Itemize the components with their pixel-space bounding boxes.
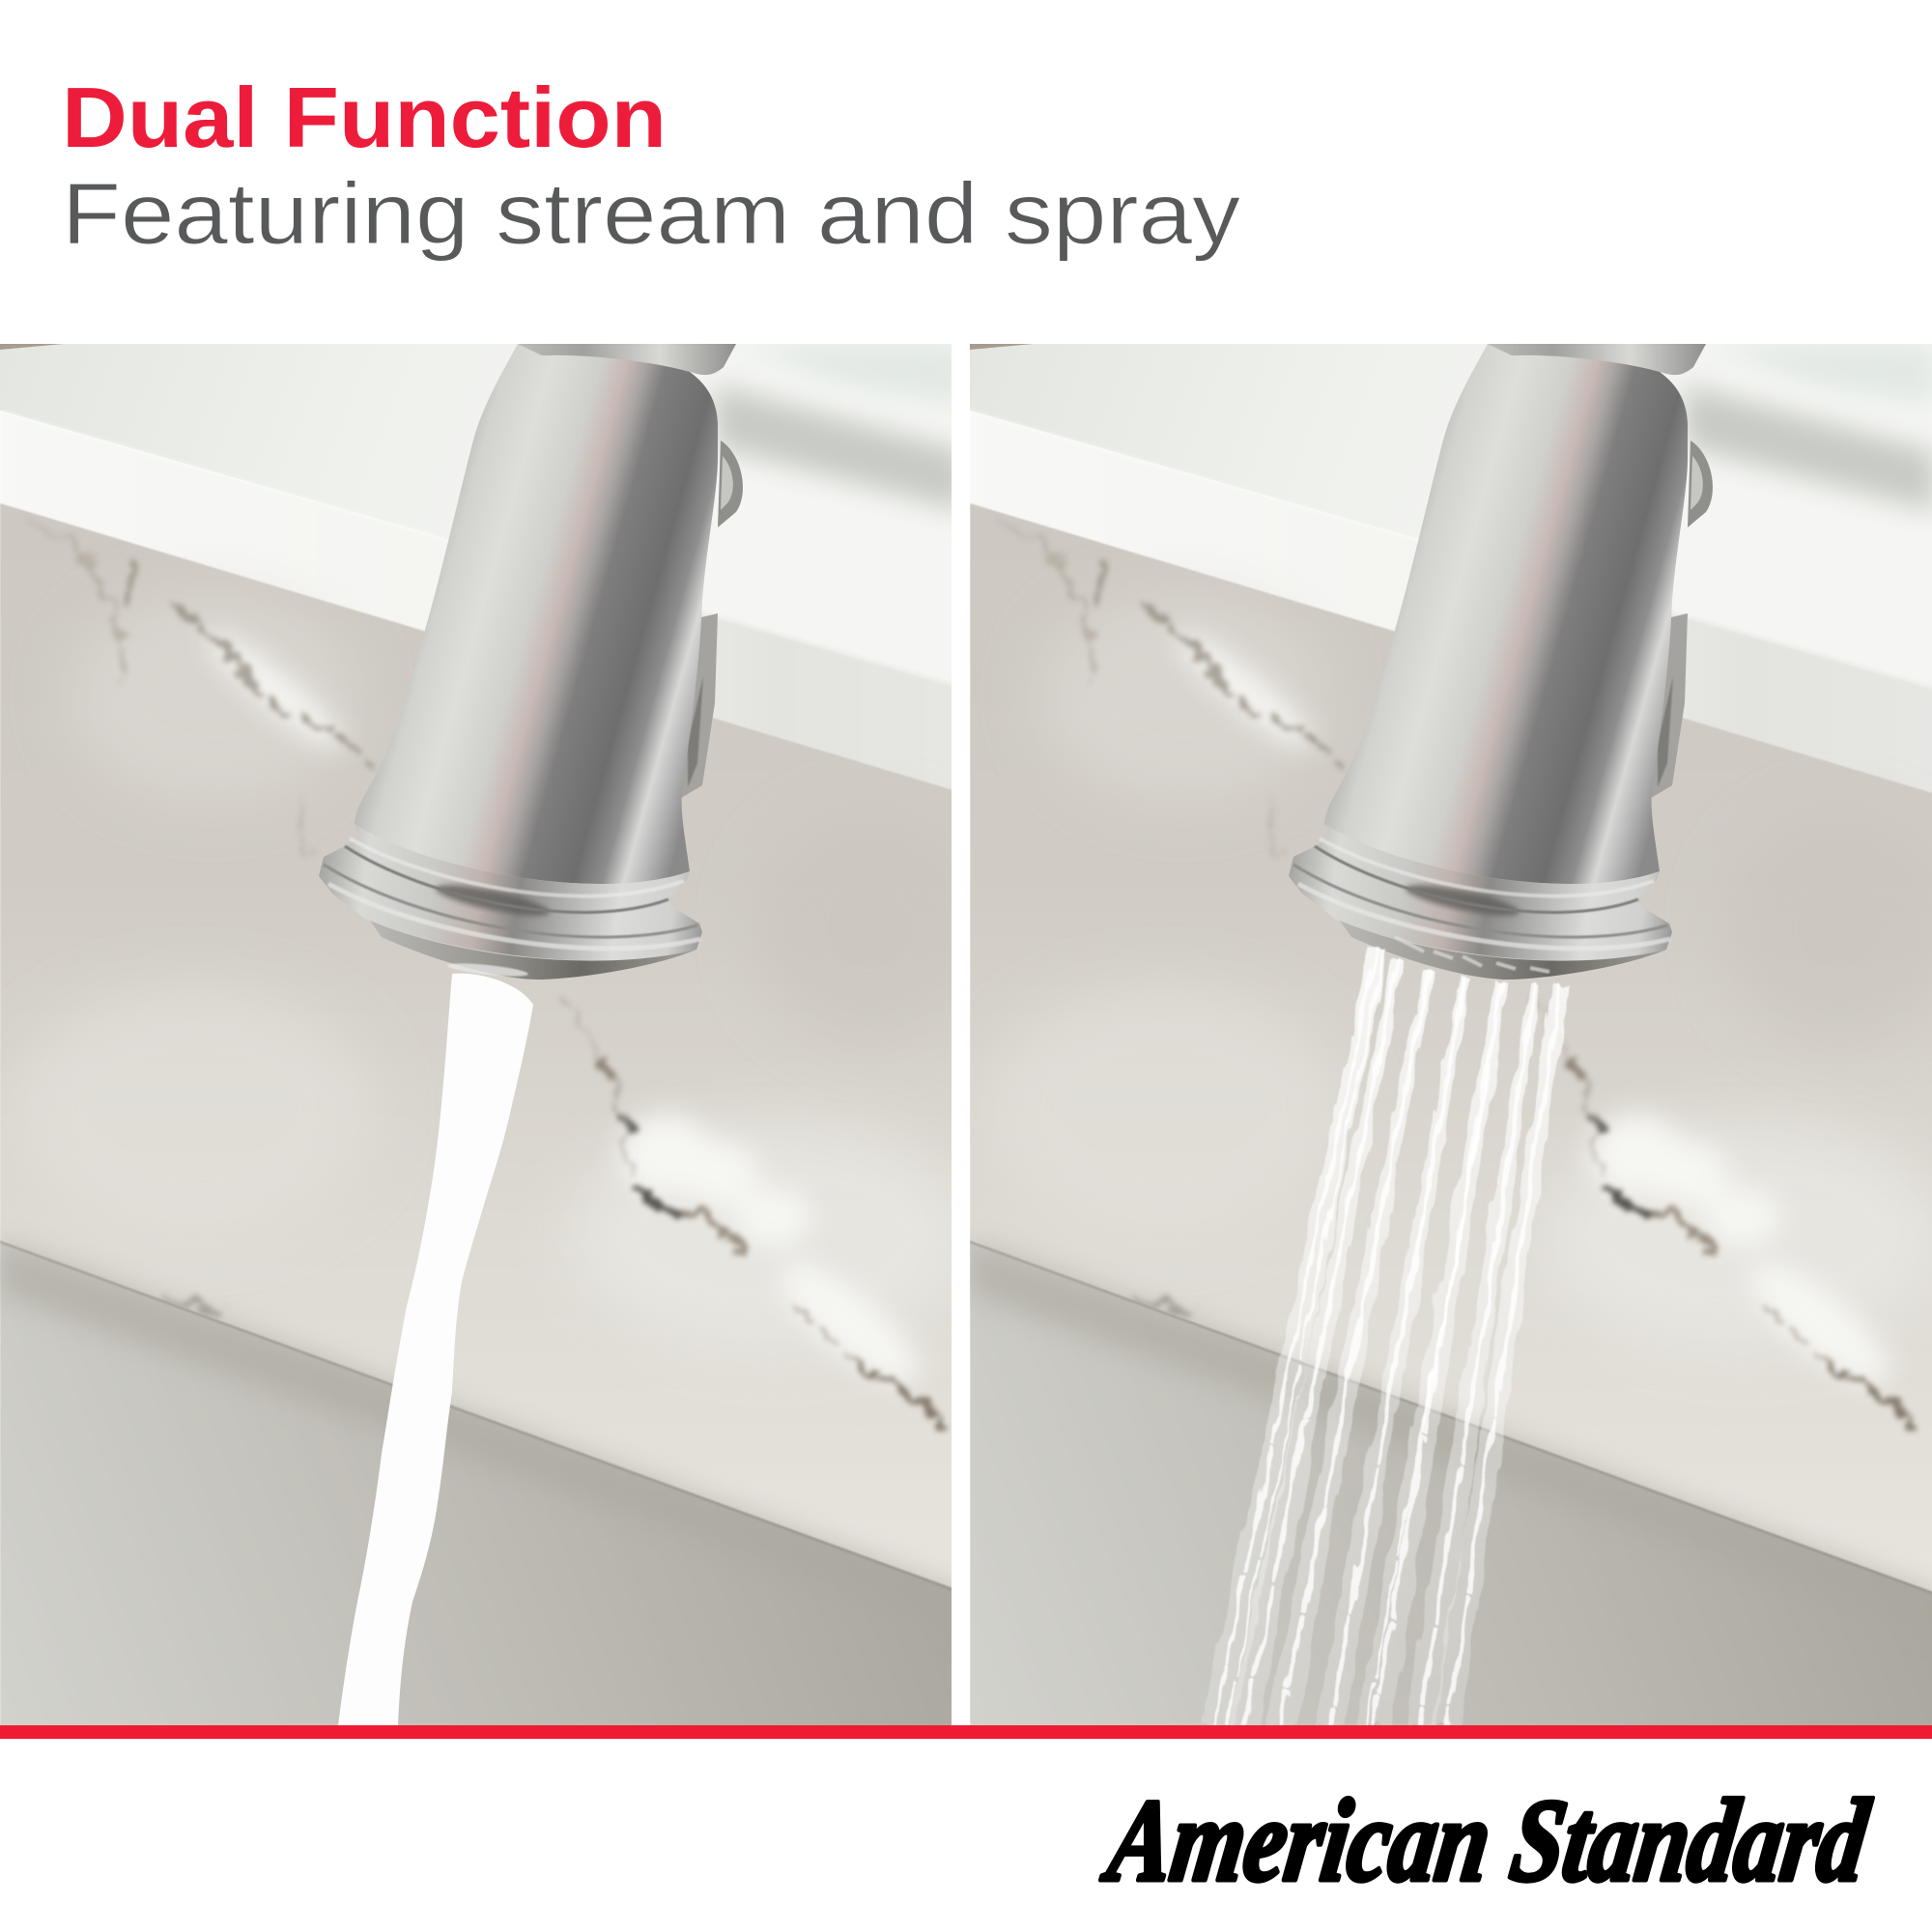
- countertop edge: [970, 344, 1932, 802]
- water highlight at nozzle: [447, 961, 528, 979]
- solid water stream: [338, 974, 533, 1725]
- marble wall: [0, 503, 985, 1593]
- panel: spray mode photo: [970, 344, 1932, 1725]
- subheading: Featuring stream and spray: Featuring stream and spray: [62, 166, 1240, 263]
- heading: Dual Function: Dual Function: [62, 70, 667, 165]
- panel: stream mode photo: [0, 344, 952, 1725]
- title: [62, 70, 1240, 263]
- spray nozzles: [1395, 937, 1549, 972]
- red divider bar: [0, 1725, 1932, 1739]
- sink basin: [0, 1240, 966, 1729]
- marble wall: [970, 503, 1932, 1593]
- sink basin: [970, 1240, 1932, 1729]
- water spray streams: [1202, 947, 1569, 1725]
- countertop edge: [0, 344, 966, 802]
- faucet spray head: [319, 344, 743, 980]
- faucet spray head: [1289, 344, 1713, 980]
